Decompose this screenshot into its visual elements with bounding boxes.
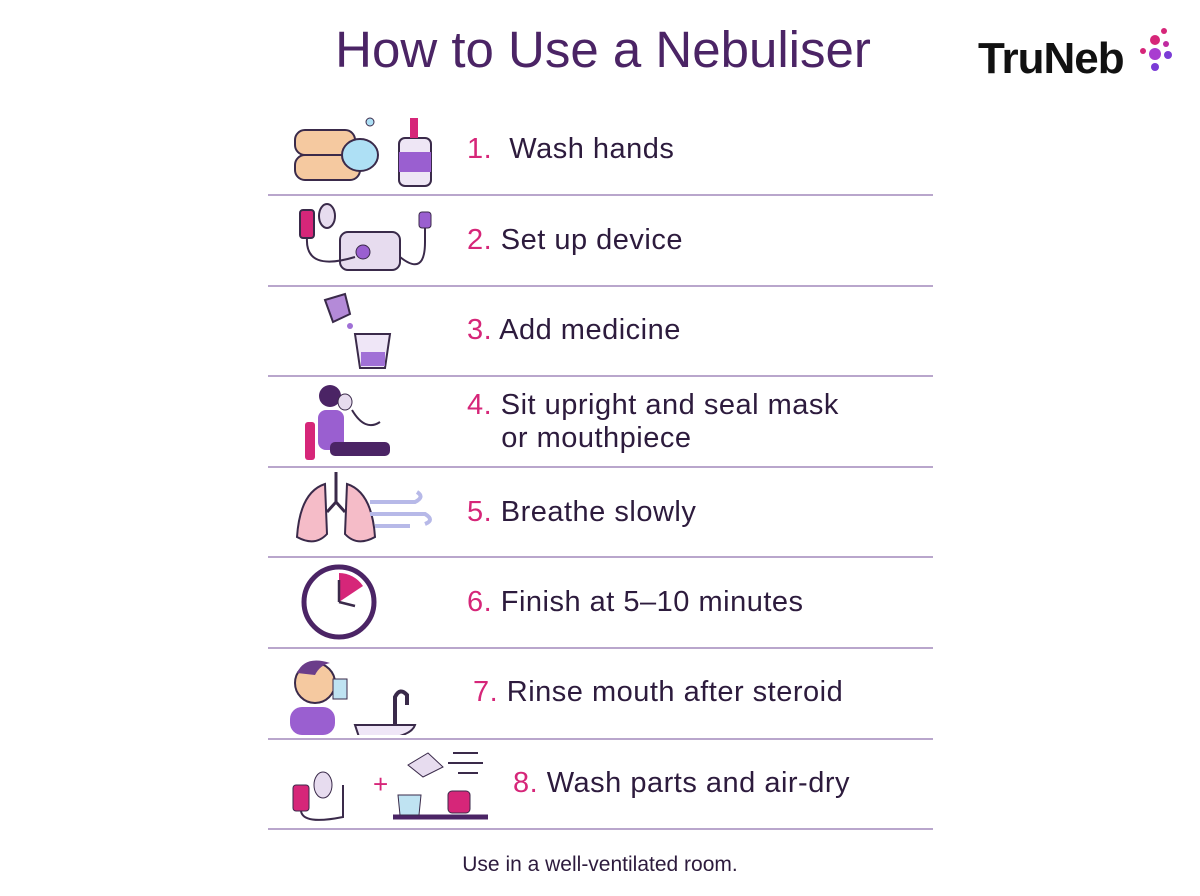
step 7: 7. Rinse mouth after steroid bbox=[473, 676, 843, 708]
icon: wash parts: + bbox=[373, 769, 388, 799]
icon: clock bbox=[302, 564, 376, 640]
step 4 bbox=[467, 389, 839, 454]
step 4: 4. Sit upright and seal mask bbox=[467, 389, 839, 421]
step 6: 6. Finish at 5–10 minutes bbox=[467, 586, 804, 618]
icon: wash hands bbox=[294, 118, 432, 187]
step 4: or mouthpiece bbox=[501, 422, 692, 454]
step 8: 8. Wash parts and air-dry bbox=[513, 767, 850, 799]
icon: wash parts bbox=[292, 752, 488, 821]
icon: device bbox=[299, 203, 432, 271]
step 2: 2. Set up device bbox=[467, 224, 683, 256]
title: How to Use a Nebuliser bbox=[335, 21, 871, 78]
step 1: 1. Wash hands bbox=[467, 133, 674, 165]
logo bbox=[978, 28, 1172, 83]
icon: medicine cup bbox=[324, 292, 392, 369]
icon: seated person bbox=[305, 385, 390, 460]
icon: lungs bbox=[296, 472, 432, 542]
step 3: 3. Add medicine bbox=[467, 314, 681, 346]
step 5: 5. Breathe slowly bbox=[467, 496, 696, 528]
icon: rinse mouth bbox=[290, 660, 416, 735]
logo: TruNeb bbox=[978, 34, 1124, 83]
footer note: Use in a well-ventilated room. bbox=[462, 853, 738, 876]
